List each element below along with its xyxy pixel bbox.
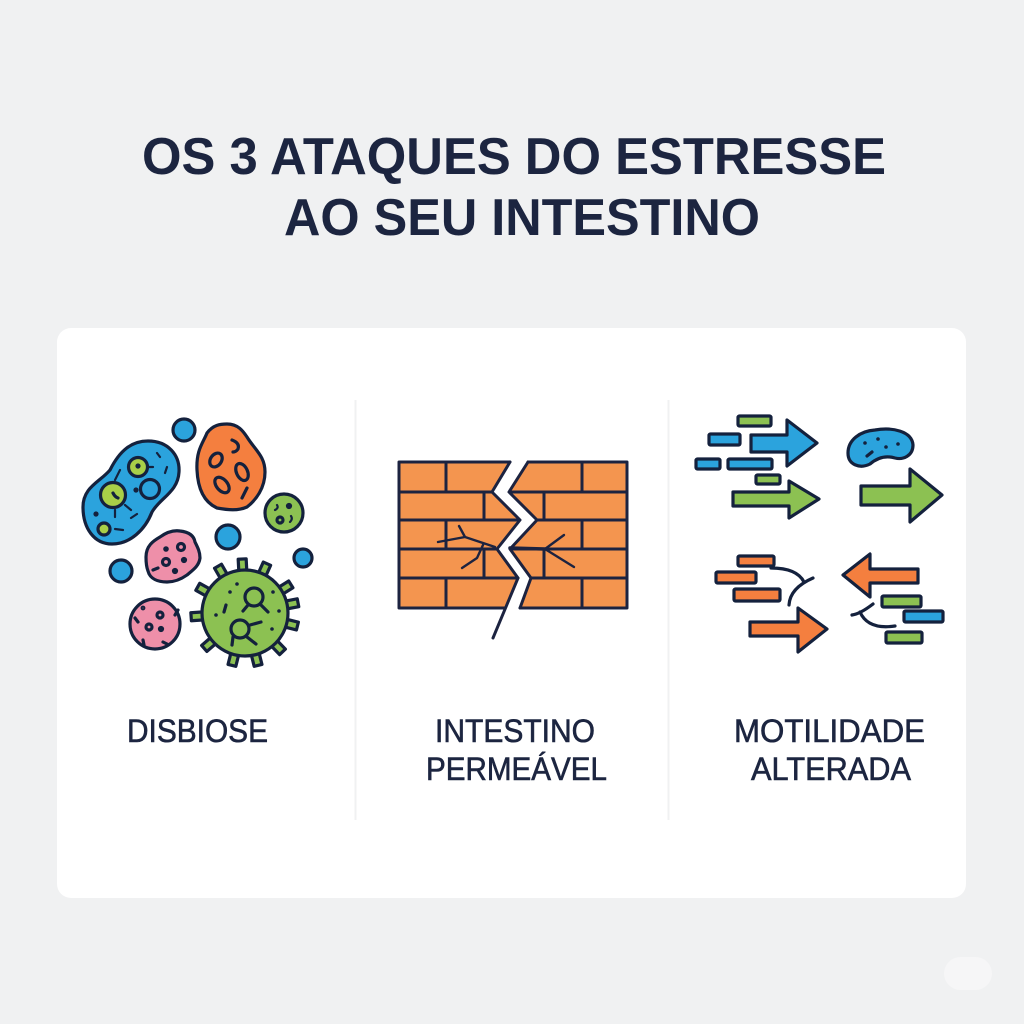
panel: card	[57, 328, 966, 898]
bottom left arrows	[716, 556, 827, 652]
pink round microbe	[130, 599, 180, 649]
icon: microbes (disbiose)	[83, 419, 312, 666]
label: motilidade alterada: ALTERADA	[751, 751, 912, 787]
pink microbe	[146, 531, 200, 582]
label: intestino permeável: PERMEÁVEL	[426, 751, 607, 787]
label: disbiose: DISBIOSE	[127, 713, 268, 749]
blue dots	[110, 419, 312, 582]
small green microbe	[265, 494, 303, 532]
title: OS 3 ATAQUES DO ESTRESSE	[142, 128, 886, 186]
icon: altered motility arrows	[696, 416, 943, 652]
top left arrows	[696, 416, 819, 518]
label: motilidade alterada: MOTILIDADE	[734, 713, 925, 749]
virus	[191, 559, 299, 666]
bottom right arrows	[843, 554, 943, 643]
top right bacterium and arrow	[848, 429, 942, 522]
title: AO SEU INTESTINO	[284, 189, 760, 247]
label: intestino permeável: INTESTINO	[435, 713, 595, 749]
title	[142, 128, 886, 247]
blue bacterium	[83, 441, 179, 544]
watermark badge	[944, 957, 992, 990]
icon: cracked brick wall	[399, 462, 627, 638]
orange microbe	[197, 424, 265, 510]
label: intestino permeável	[426, 713, 607, 787]
label: motilidade alterada	[734, 713, 925, 787]
